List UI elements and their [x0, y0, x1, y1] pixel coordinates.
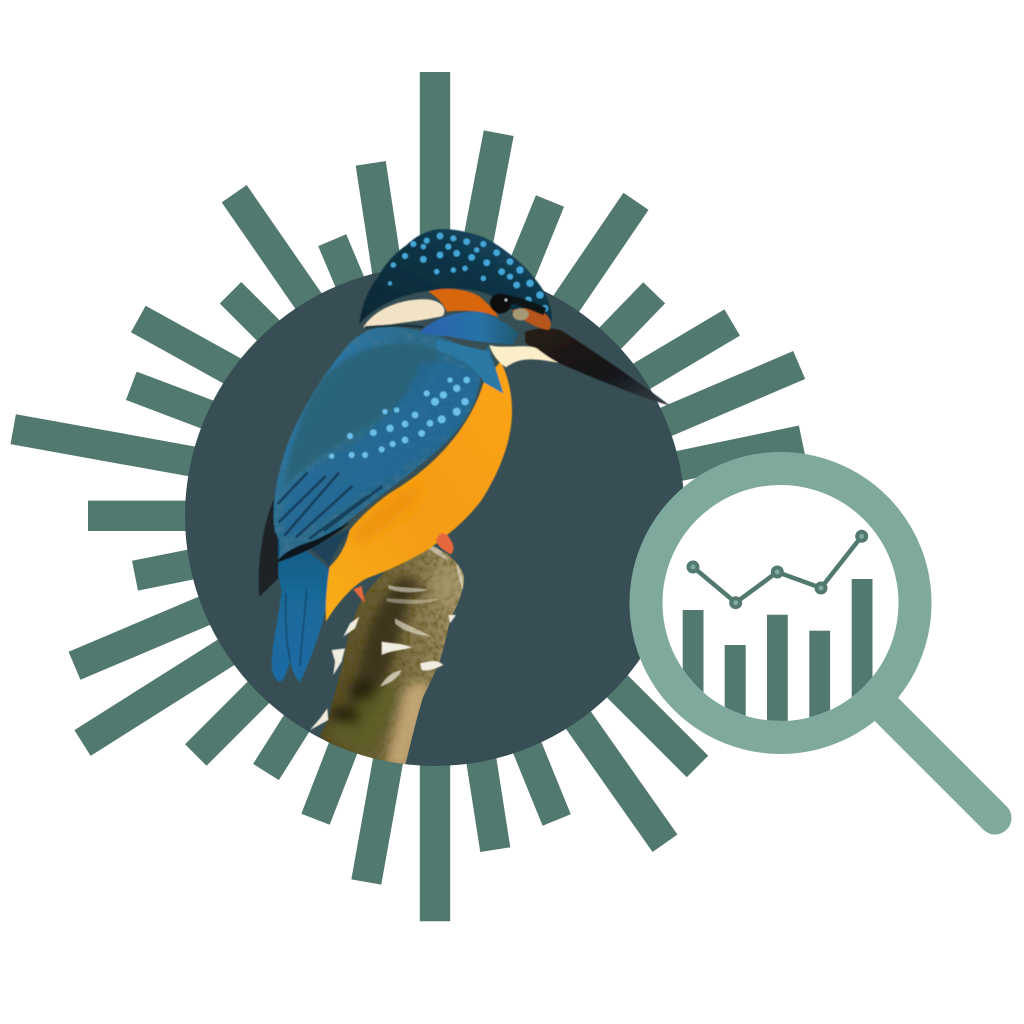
eye — [490, 293, 511, 313]
beak — [525, 328, 671, 406]
orange ear patch — [428, 289, 498, 317]
crown spots — [388, 233, 548, 313]
line chart — [688, 532, 866, 607]
breast shading — [350, 483, 423, 547]
blue moustache — [420, 312, 518, 344]
perch fluff — [310, 546, 463, 730]
neck blue band — [437, 339, 503, 393]
lens — [646, 468, 915, 738]
white neck patch — [363, 299, 444, 327]
dark central circle — [185, 266, 685, 766]
wing black edge — [276, 522, 350, 563]
wing and mantle — [274, 326, 503, 563]
eye glint — [505, 299, 507, 301]
perch — [320, 547, 464, 770]
legs — [353, 533, 453, 603]
wing shading — [285, 343, 440, 487]
handle — [880, 703, 995, 818]
orange breast — [326, 362, 512, 622]
eye stripe — [498, 298, 545, 312]
tail feather divide — [286, 590, 307, 667]
dark wing tip — [259, 495, 278, 597]
face patch — [512, 308, 551, 330]
kingfisher — [259, 229, 671, 682]
tail feathers — [272, 528, 330, 682]
collar shadow — [365, 326, 423, 327]
wing feather strokes — [278, 473, 382, 538]
lore spot — [513, 308, 529, 320]
shadow under wing — [310, 528, 350, 567]
white throat — [489, 345, 558, 367]
sunburst rays — [13, 72, 802, 921]
wing spots — [329, 377, 470, 459]
bar chart — [682, 579, 872, 721]
lower wing coverts — [284, 362, 478, 540]
head crown — [359, 229, 552, 330]
magnifying glass — [646, 468, 995, 818]
